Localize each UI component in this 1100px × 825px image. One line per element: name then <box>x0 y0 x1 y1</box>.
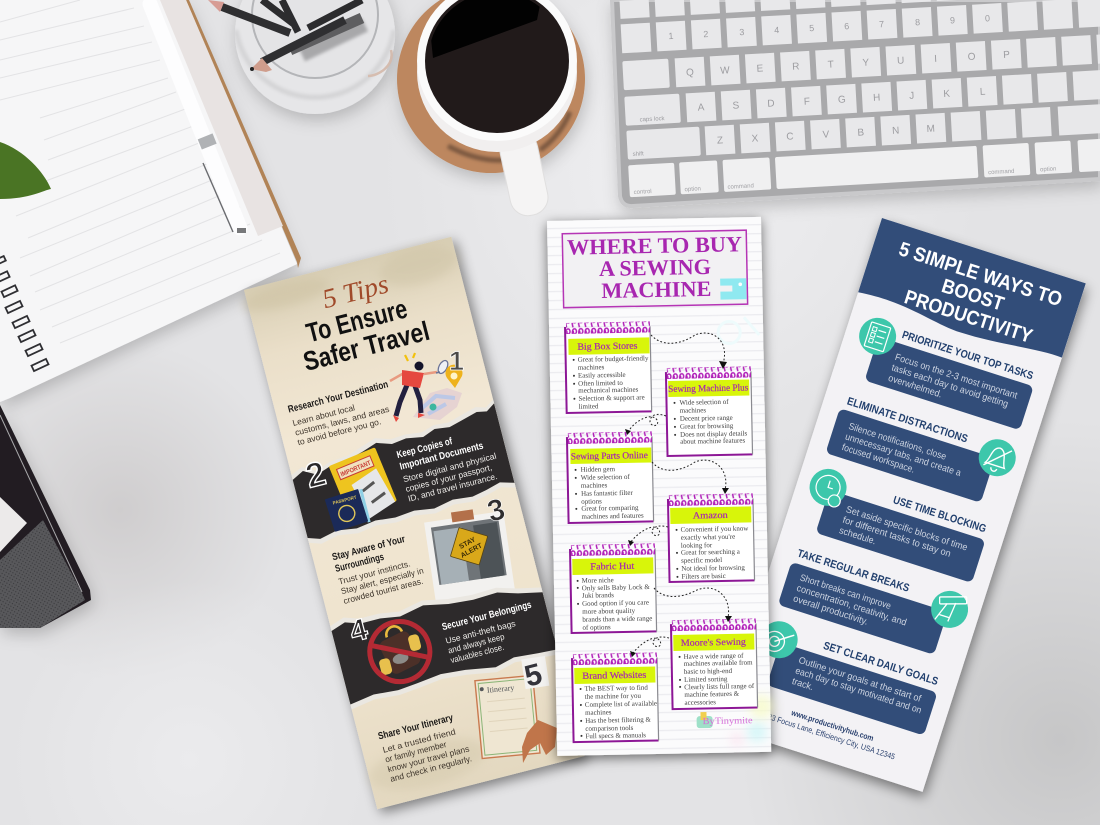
card: moore's sewing: machines available from <box>684 659 753 668</box>
card: amazon: Not ideal for browsing <box>681 564 745 573</box>
leaf <box>0 142 51 199</box>
tip: prioritize your top tasks: Focus on the 2-3 most important <box>893 352 1019 402</box>
function key row <box>620 0 1100 10</box>
tip 5: share your itinerary <box>377 711 473 784</box>
logo: ByTinymite <box>696 711 753 728</box>
tip: eliminate distractions: focused workspace. <box>840 442 916 476</box>
tip: prioritize your top tasks: tasks each day to avoid getting <box>890 362 1010 410</box>
title: To Ensure Safer Travel <box>293 290 433 377</box>
tip 5: share your itinerary: Share Your Itinerary <box>377 713 455 742</box>
card: big box stores: Big Box Stores <box>577 342 638 353</box>
card: big box stores: mechanical machines <box>578 386 639 395</box>
tip 1: research your destination: to avoid before you go. <box>296 416 382 447</box>
number key row: 9 <box>950 15 955 25</box>
ZXCV key row: B <box>857 127 865 139</box>
card: brand websites: Has the best filtering & <box>585 716 652 725</box>
icon: checklist <box>854 313 901 360</box>
tip 1: research your destination: Learn about local <box>291 402 356 428</box>
number 4: 4 <box>346 613 371 649</box>
card: big box stores: Great for budget-friendly <box>578 354 649 364</box>
illustration: polaroid with stay alert sign <box>423 505 516 606</box>
tip: set clear daily goals: track. <box>790 676 815 693</box>
illustration: polaroid with stay alert sign: STAY <box>458 536 477 551</box>
ZXCV key row: shift <box>633 151 644 158</box>
card: amazon: specific model <box>681 556 722 565</box>
tip: eliminate distractions: Silence notifications, close <box>847 421 948 463</box>
ZXCV key row: M <box>926 123 935 135</box>
title box: A SEWING <box>599 254 711 281</box>
tip: eliminate distractions <box>825 390 1021 509</box>
ASDF key row: caps lock <box>639 116 666 123</box>
ASDF key row: K <box>943 89 951 100</box>
bottom key row: command <box>988 169 1015 176</box>
icon: hand holding bar <box>926 586 973 633</box>
tip: prioritize your top tasks: overwhelmed. <box>887 373 943 400</box>
tip: use time blocking: Set aside specific blocks of time <box>844 504 969 554</box>
card: amazon <box>668 493 755 582</box>
card: sewing parts online: Wide selection of <box>581 473 631 482</box>
card: big box stores: machines <box>578 363 605 372</box>
title: To Ensure Safer Travel: Safer Travel <box>300 316 433 377</box>
QWERTY key row: O <box>967 52 976 63</box>
number 5: 5 <box>521 658 546 694</box>
map pin <box>445 365 462 388</box>
tip 1: research your destination <box>287 379 398 448</box>
paper stains <box>240 238 583 802</box>
card: sewing parts online: machines and features <box>581 512 644 521</box>
card: amazon: Great for searching a <box>681 548 741 557</box>
bottom key row <box>628 138 1100 197</box>
card: amazon: looking for <box>681 541 713 550</box>
tip: set clear daily goals: SET CLEAR DAILY GOALS <box>822 640 940 688</box>
card: moore's sewing: Have a wide range of <box>684 652 744 661</box>
dashed arrows between sewing cards <box>628 333 729 654</box>
number key row: 7 <box>879 19 884 29</box>
card: sewing parts online <box>567 431 654 523</box>
card: amazon: Amazon <box>693 511 728 522</box>
pen <box>150 4 246 233</box>
arrow: sewing machine plus to sewing parts <box>628 414 666 432</box>
card: fabric hut: Fabric Hut <box>590 562 635 573</box>
arrow: big box to sewing machine plus <box>651 333 725 364</box>
card: moore's sewing: machine features & <box>684 690 740 699</box>
heading: 5 Tips: 5 Tips <box>319 268 392 314</box>
arrow: amazon to fabric hut <box>630 526 668 543</box>
illustration: folder and passport <box>315 445 401 532</box>
card: moore's sewing: Limited sorting <box>684 675 728 684</box>
tip: use time blocking <box>796 464 992 583</box>
tip: prioritize your top tasks: PRIORITIZE YOUR TOP TASKS <box>900 329 1035 382</box>
card: brand websites: machines <box>585 708 612 717</box>
QWERTY key row <box>622 34 1100 90</box>
ZXCV key row <box>626 103 1100 160</box>
number key row: 6 <box>844 21 849 31</box>
map <box>413 388 462 420</box>
card: sewing machine plus <box>666 366 753 456</box>
illustration: traveller with magnifier, map and number 1 <box>390 346 464 422</box>
QWERTY key row: T <box>827 59 834 71</box>
card: sewing machine plus: Great for browsing <box>680 422 734 431</box>
tip 4: secure your belongings <box>441 600 541 665</box>
title box <box>562 230 748 308</box>
card: sewing parts online: options <box>581 497 602 506</box>
ASDF key row: S <box>732 100 740 112</box>
tip 3: stay aware <box>331 531 427 606</box>
card: fabric hut: Good option if you care <box>582 599 649 608</box>
number key row: 8 <box>915 17 920 27</box>
cup <box>417 0 577 152</box>
ASDF key row: H <box>873 92 881 104</box>
logo: ByTinymite: ByTinymite <box>703 716 753 727</box>
panel: productivity tips <box>719 218 1086 792</box>
ZXCV key row: N <box>892 125 900 137</box>
tip 1: research your destination: Research Your Destination <box>287 379 389 416</box>
tip 5: share your itinerary: know your travel plans <box>386 744 470 774</box>
ASDF key row: L <box>980 87 986 98</box>
tip: take regular breaks: Short breaks can improve <box>798 572 892 612</box>
card: sewing machine plus: Does not display details <box>680 429 748 439</box>
tip 3: stay aware: Stay alert, especially in <box>340 565 425 596</box>
tip 2: keep copies: copies of your passport, <box>404 462 493 494</box>
card: sewing parts online: machines <box>581 481 608 490</box>
footer contact details: www.productivityhub.com <box>789 708 875 743</box>
arrow: sewing parts to amazon <box>652 460 726 490</box>
card: moore's sewing: Moore's Sewing <box>681 638 746 649</box>
ZXCV key row: V <box>822 129 830 141</box>
card: brand websites: Full specs & manuals <box>585 731 646 740</box>
bottom key row: command <box>727 183 754 191</box>
ASDF key row <box>624 68 1100 126</box>
ASDF key row: F <box>804 96 810 108</box>
number key row: 0 <box>985 13 990 23</box>
dark torn band 1 <box>286 400 517 547</box>
title box: MACHINE <box>601 276 712 303</box>
figure <box>390 372 437 381</box>
card: sewing parts online: Great for comparing <box>581 504 639 513</box>
tip: use time blocking: schedule. <box>838 525 877 547</box>
title: 5 simple ways to boost productivity: 5 SIMPLE WAYS TO <box>896 238 1065 311</box>
QWERTY key row: R <box>792 61 800 73</box>
icon: sewing machine <box>720 278 747 300</box>
ASDF key row: A <box>697 102 705 114</box>
card: big box stores: Often limited to <box>578 379 623 388</box>
icon: target <box>756 616 802 663</box>
arrow: moore's to brand websites <box>632 637 669 654</box>
card: brand websites: the machine for you <box>585 692 641 701</box>
illustration: itinerary card <box>475 675 540 758</box>
tip 5: share your itinerary: Let a trusted friend <box>381 726 457 755</box>
illustration: orange cutout <box>522 720 557 763</box>
card: amazon: Convenient if you know <box>680 524 749 534</box>
ZXCV key row: Z <box>717 135 723 147</box>
QWERTY key row: P <box>1003 50 1011 61</box>
card: fabric hut: of options <box>582 623 611 632</box>
ASDF key row: D <box>767 98 775 110</box>
card: fabric hut: Juki brands <box>582 591 614 600</box>
QWERTY key row: W <box>720 65 731 77</box>
title box: WHERE TO BUY <box>567 231 742 260</box>
card: fabric hut: More niche <box>582 576 614 585</box>
tip 5: share your itinerary: and check in regularly. <box>389 753 473 784</box>
tip 3: stay aware: Trust your instincts. <box>337 558 411 587</box>
illustration: polaroid with stay alert sign: ALERT <box>460 542 484 560</box>
number key row: 5 <box>809 23 815 33</box>
card: sewing machine plus: Sewing Machine Plus <box>668 383 749 395</box>
dark torn band 2 <box>329 568 559 709</box>
tip 2: keep copies: ID, and travel insurance. <box>407 471 498 504</box>
icon: clock <box>805 464 851 511</box>
QWERTY key row: Y <box>862 57 870 69</box>
illustration: folder and passport: IMPORTANT <box>340 460 372 478</box>
tip 4: secure your belongings: Secure Your Belongings <box>441 600 533 633</box>
title: 5 simple ways to boost productivity: PRODUCTIVITY <box>902 286 1036 348</box>
title: 5 simple ways to boost productivity <box>883 238 1065 353</box>
tip 3: stay aware: Stay Aware of Your <box>331 534 407 563</box>
illustration: folder and passport: PASSPORT <box>332 495 357 506</box>
tip 1: research your destination: customs, laws, and areas <box>294 404 390 438</box>
card: fabric hut: Only sells Baby Lock & <box>582 583 650 592</box>
notebook with ruled page <box>0 0 301 402</box>
card: brand websites: Complete list of available <box>585 699 657 709</box>
tip: eliminate distractions: ELIMINATE DISTRACTIONS <box>846 395 969 445</box>
title: To Ensure Safer Travel: To Ensure <box>303 294 410 348</box>
number key row: 3 <box>739 27 745 37</box>
tip: use time blocking: for different tasks to stay on <box>841 515 952 560</box>
card: brand websites <box>572 652 659 742</box>
tip: prioritize your top tasks <box>846 313 1039 430</box>
card: moore's sewing: accessories <box>684 698 716 707</box>
ASDF key row: G <box>838 94 846 106</box>
tip: set clear daily goals <box>747 616 944 736</box>
tip 4: secure your belongings: Use anti-theft bags <box>444 618 517 646</box>
card: amazon: Filters are basic <box>681 572 726 581</box>
header band <box>856 218 1086 364</box>
QWERTY key row: E <box>756 63 764 75</box>
number key row: 1 <box>668 31 674 41</box>
bottom key row: control <box>634 189 652 196</box>
card: brand websites: Brand Websites <box>582 671 647 682</box>
pale cyan decorations <box>718 317 759 344</box>
card: sewing machine plus: machines <box>680 406 706 415</box>
card: big box stores <box>565 321 652 413</box>
footer contact details: 123 Focus Lane, Efficiency City, USA 12345 <box>763 711 897 762</box>
card: sewing machine plus: about machine features <box>680 437 746 446</box>
number 3: 3 <box>484 493 508 529</box>
illustration: itinerary card: Itinerary <box>486 683 515 695</box>
tip 2: keep copies <box>396 426 502 504</box>
tip: take regular breaks: concentration, creativity, and <box>795 583 908 629</box>
card: sewing parts online: Hidden gem <box>581 465 616 474</box>
number 2: 2 <box>302 454 330 496</box>
footer contact details <box>763 701 900 762</box>
tip 2: keep copies: Important Documents <box>399 440 485 473</box>
card: sewing parts online: Sewing Parts Online <box>571 451 648 462</box>
bottom key row: option <box>684 186 701 193</box>
tip: take regular breaks: overall productivity. <box>792 593 869 628</box>
black book with fabric cover <box>0 405 91 628</box>
panel: travel safety tips <box>239 237 586 810</box>
card: moore's sewing: basic to high-end <box>684 667 733 676</box>
card: brand websites: The BEST way to find <box>585 684 648 693</box>
tip 2: keep copies: Keep Copies of <box>396 436 454 461</box>
card: sewing machine plus: Wide selection of <box>679 398 729 407</box>
cup handle <box>497 129 551 219</box>
card: moore's sewing: Clearly lists full range of <box>684 682 755 691</box>
number key row: 2 <box>703 29 709 39</box>
card: amazon: exactly what you're <box>681 533 735 542</box>
card: big box stores: Easily accessible <box>578 371 626 380</box>
icon: prohibited backpack <box>363 615 436 688</box>
pale pastel corner decoration <box>729 695 774 747</box>
card: sewing machine plus: Decent price range <box>680 414 733 423</box>
QWERTY key row: I <box>934 54 937 65</box>
panel: where to buy a sewing machine <box>547 217 774 756</box>
tip 5: share your itinerary: or family member <box>384 739 448 764</box>
bottom key row: option <box>1040 166 1057 173</box>
tip: take regular breaks <box>778 541 973 661</box>
QWERTY key row: U <box>897 56 905 67</box>
card: big box stores: Selection & support are <box>578 393 645 403</box>
glass jar of pencils <box>208 0 395 114</box>
card: big box stores: limited <box>578 402 599 411</box>
tip: eliminate distractions: unnecessary tabs, and create a <box>844 432 963 479</box>
number 1: 1 <box>449 346 464 376</box>
arrow: fabric hut to moore's <box>654 588 729 618</box>
icon: muted bell <box>974 434 1021 481</box>
card: brand websites: comparison tools <box>585 724 634 733</box>
arrowheads <box>625 361 732 657</box>
spiral binding <box>0 256 49 371</box>
tip 3: stay aware: crowded tourist areas. <box>342 576 424 606</box>
card: fabric hut: brands than a wide range <box>582 614 652 624</box>
QWERTY key row: Q <box>686 67 694 79</box>
ZXCV key row: X <box>751 133 759 145</box>
tip 3: stay aware: Surroundings <box>334 552 386 575</box>
keyboard <box>612 0 1100 206</box>
tip 4: secure your belongings: valuables close. <box>449 642 505 665</box>
title: 5 simple ways to boost productivity: BOOST <box>939 275 1007 316</box>
number 5 <box>518 654 553 694</box>
card: fabric hut <box>570 543 657 633</box>
ZXCV key row: C <box>786 131 794 143</box>
tip: set clear daily goals: each day to stay motivated and on <box>794 665 923 716</box>
card: fabric hut: more about quality <box>582 607 636 616</box>
tip: use time blocking: USE TIME BLOCKING <box>892 494 988 535</box>
tip 4: secure your belongings: and always keep <box>447 631 506 655</box>
tip: take regular breaks: TAKE REGULAR BREAKS <box>796 547 911 595</box>
number key row: 4 <box>774 25 780 35</box>
tip 2: keep copies: Store digital and physical <box>402 451 497 484</box>
card: sewing parts online: Has fantastic filter <box>581 489 633 498</box>
ASDF key row: J <box>909 91 915 102</box>
number key row <box>621 6 1100 44</box>
coffee cup on cork coaster <box>397 0 585 219</box>
card: moore's sewing <box>671 618 758 709</box>
tip: set clear daily goals: Outline your goals at the start of <box>797 655 923 705</box>
